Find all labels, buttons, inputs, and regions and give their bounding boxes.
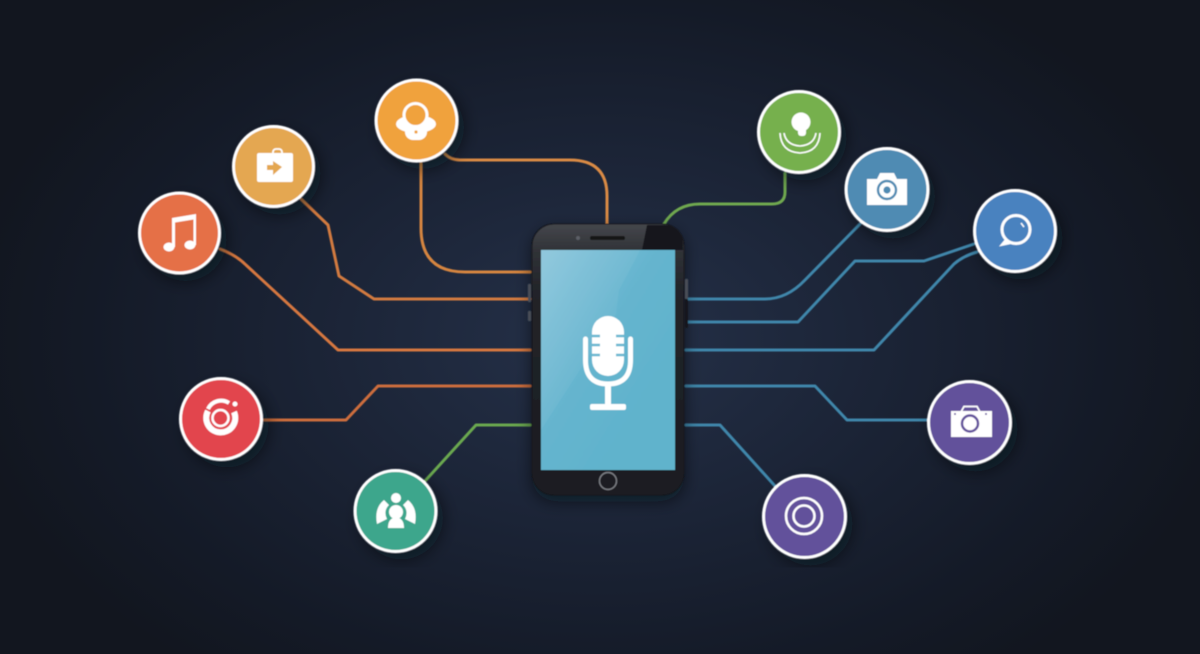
icon: headset figure — [396, 104, 436, 140]
phone side buttons — [528, 279, 688, 328]
node: blue camera — [846, 148, 928, 230]
line: chat upper to phone — [688, 244, 974, 322]
node: red target — [180, 378, 262, 460]
icon: people group — [376, 493, 416, 528]
icon: speech bubble — [999, 216, 1030, 246]
line: blue camera to phone — [688, 223, 861, 299]
line: music to phone — [220, 249, 530, 350]
node: teal people — [355, 470, 436, 552]
phone top sheen — [642, 225, 683, 250]
node: music — [140, 193, 220, 273]
icon: target — [206, 401, 238, 432]
line: red target to phone — [263, 386, 530, 420]
icon: concentric rings — [786, 498, 822, 534]
icon: camera — [951, 406, 992, 437]
line: green to phone — [664, 173, 785, 224]
phone screen — [541, 250, 675, 470]
line: headset to phone left — [421, 162, 530, 272]
home button — [600, 472, 616, 490]
line: purple ring to phone — [686, 425, 775, 486]
icon: microphone — [586, 316, 630, 410]
artwork — [140, 80, 1056, 558]
phone body — [532, 224, 684, 495]
node: headset — [376, 80, 457, 161]
line: teal people to phone — [425, 425, 530, 481]
node: briefcase — [234, 126, 314, 206]
connector lines — [220, 154, 977, 486]
node: chat — [974, 190, 1056, 272]
icon: briefcase with arrow — [257, 149, 293, 182]
node: green voice — [758, 92, 840, 172]
icon: voice waves — [780, 112, 820, 153]
line: briefcase to phone — [301, 199, 530, 299]
icon: music note — [164, 214, 196, 252]
line: purple camera to phone — [686, 386, 928, 420]
node: purple ring — [764, 476, 846, 558]
line: headset to phone top — [445, 154, 607, 224]
smartphone — [528, 224, 688, 495]
screen glare — [541, 250, 640, 430]
phone speaker and camera — [576, 236, 625, 240]
node: purple camera — [928, 382, 1010, 464]
line: chat lower to phone — [686, 252, 977, 350]
icon: camera — [867, 173, 907, 205]
